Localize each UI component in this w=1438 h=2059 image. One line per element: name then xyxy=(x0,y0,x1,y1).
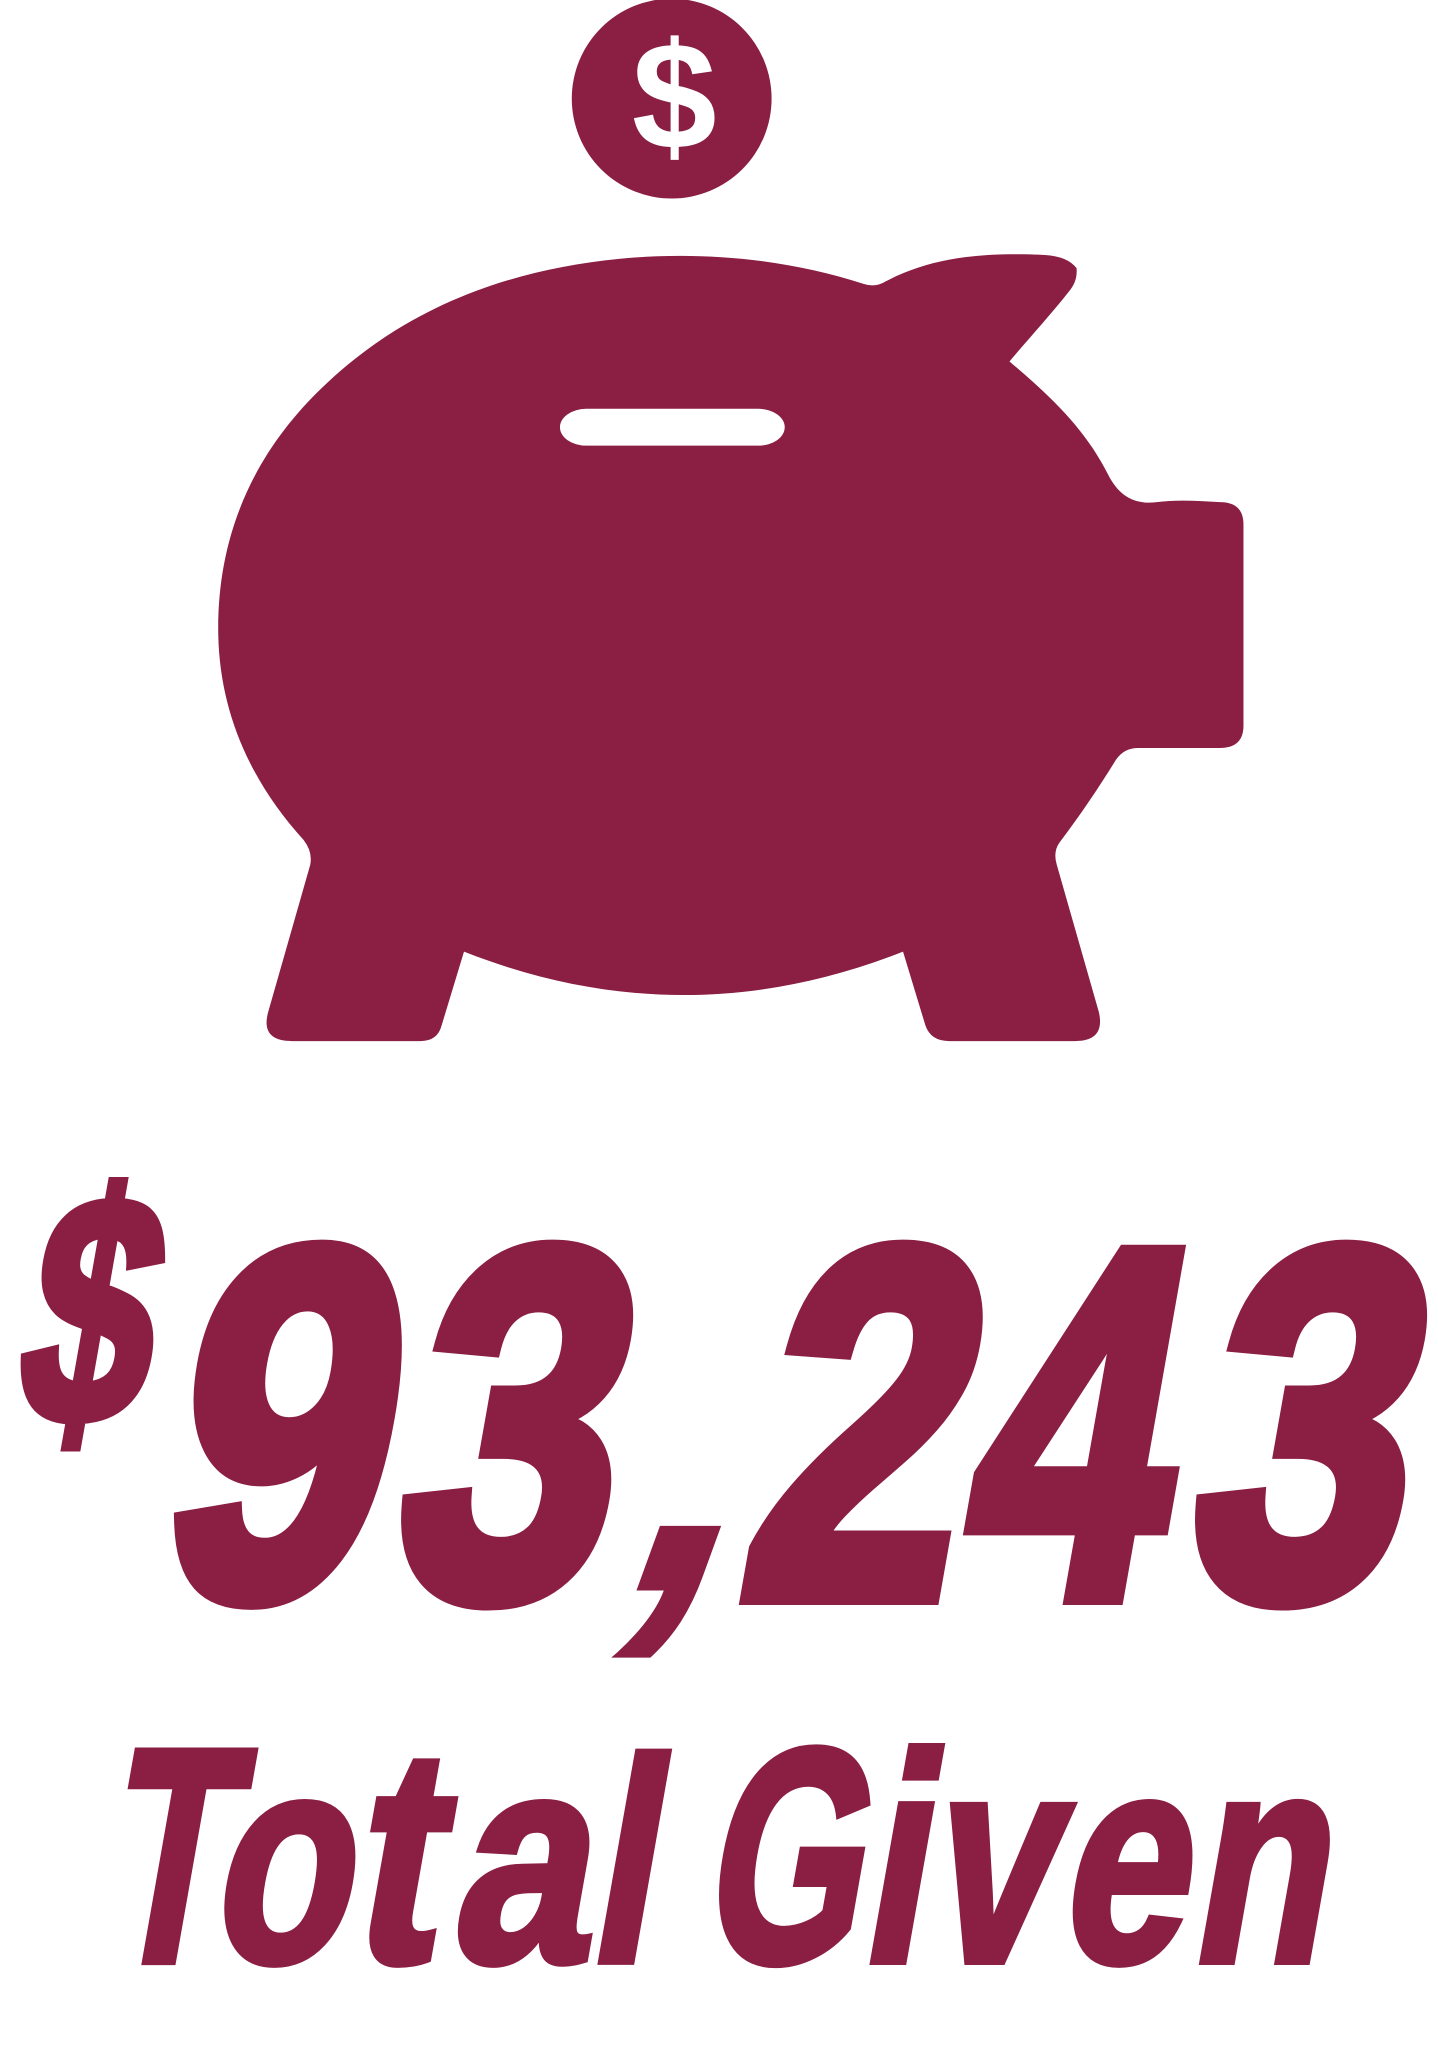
amount: $93,243: 4 xyxy=(935,1146,1234,1701)
amount: $93,243: 9 xyxy=(131,1147,450,1702)
amount: $93,243: 2 xyxy=(715,1147,1027,1702)
caption: Total Given: v xyxy=(914,1695,1095,2024)
caption: Total Given: T xyxy=(86,1687,269,2027)
caption: Total Given: G xyxy=(687,1687,904,2027)
icon: piggy bank xyxy=(218,254,1243,1041)
icon: coin with dollar sign xyxy=(572,0,772,198)
caption: Total Given: n xyxy=(1176,1695,1368,2024)
caption: Total Given xyxy=(86,1685,1368,2027)
caption: Total Given: t xyxy=(336,1685,479,2026)
icon: coin with dollar sign: $ xyxy=(632,12,717,182)
amount: $93,243 xyxy=(0,1130,1438,1702)
amount: $93,243: , xyxy=(573,1198,869,1683)
caption: Total Given: a xyxy=(436,1695,632,2024)
caption: Total Given: l xyxy=(574,1701,694,2023)
amount: $93,243: $ xyxy=(0,1130,191,1492)
caption: Total Given: i xyxy=(846,1695,967,2025)
amount: $93,243: 3 xyxy=(365,1147,678,1702)
caption: Total Given: e xyxy=(1045,1696,1228,2025)
caption: Total Given: o xyxy=(196,1696,392,2025)
